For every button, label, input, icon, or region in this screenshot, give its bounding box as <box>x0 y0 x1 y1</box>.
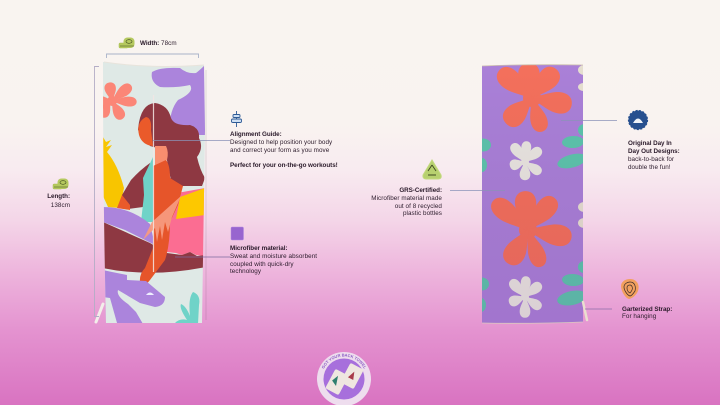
text: gartered strap: For hanging <box>622 313 656 320</box>
text: GRS certified: plastic bottles <box>403 210 442 217</box>
white flower bottom <box>507 276 544 318</box>
alignment guide line on towel <box>152 95 154 272</box>
text: GRS certified: out of 8 recycled <box>395 203 442 210</box>
face <box>138 117 153 146</box>
length bracket <box>94 66 99 316</box>
text: alignment guide <box>230 131 338 169</box>
salmon flower <box>103 82 137 120</box>
text: alignment guide: Perfect for your on-the-go workouts! <box>230 162 338 169</box>
label: length <box>47 193 70 208</box>
text: GRS certified <box>371 187 442 217</box>
logo badge <box>317 352 371 405</box>
label: width: Width: 78cm <box>140 40 177 47</box>
coral flower bottom <box>487 190 573 270</box>
peach arm <box>143 196 181 242</box>
strap <box>583 302 587 320</box>
text: original designs: back-to-back for <box>628 156 674 163</box>
maroon band <box>103 222 206 273</box>
icon: alignment guide <box>232 111 242 127</box>
label: length: 138cm <box>51 202 70 208</box>
text: original designs: double the fun! <box>628 164 671 171</box>
hair <box>138 103 205 186</box>
icon: gartered strap <box>621 279 639 299</box>
front towel <box>96 60 210 325</box>
text: gartered strap <box>622 306 672 320</box>
bottom lavender rabbit <box>103 270 165 324</box>
teal torso <box>141 157 153 222</box>
illustration layer: towels, leader lines and icons <box>52 38 648 405</box>
text: original designs <box>628 140 680 171</box>
yellow skirt <box>176 188 205 219</box>
leader lines <box>153 120 617 309</box>
rabbit eye <box>146 292 154 295</box>
text: alignment guide: Designed to help position your body <box>230 139 332 146</box>
lavender blob top right <box>152 64 206 135</box>
logo cards <box>325 369 349 395</box>
text: original designs: Original Day In <box>628 140 672 147</box>
text: gartered strap: Garterized Strap: <box>622 306 672 312</box>
icon: length tape measure <box>53 178 68 189</box>
back towel <box>475 62 590 326</box>
teal plant <box>175 292 199 324</box>
edge motifs <box>482 124 583 312</box>
icon: original design badge <box>628 110 648 130</box>
orange torso <box>153 160 183 224</box>
coral flower top <box>496 65 572 132</box>
width bracket <box>106 54 198 58</box>
text: original designs: Day Out Designs: <box>628 148 680 155</box>
text: microfiber material: Microfiber material: <box>230 245 287 252</box>
strap <box>96 304 103 322</box>
icon: recycling <box>423 160 441 179</box>
maroon shoulder <box>122 163 150 209</box>
text: microfiber material: Sweat and moisture absorbent <box>230 253 317 260</box>
neck <box>155 146 168 166</box>
orange leg <box>140 222 170 285</box>
text: microfiber material: technology <box>230 268 261 275</box>
text: microfiber material <box>230 245 317 275</box>
text: alignment guide: and correct your form as you move <box>230 147 329 154</box>
text: GRS certified: Microfiber material made <box>371 195 442 202</box>
logo badge: GOT YOUR BACK TOWEL <box>322 354 366 369</box>
text: GRS certified: GRS-Certified: <box>399 187 442 194</box>
icon: width tape measure <box>119 38 134 48</box>
white flower top <box>508 141 544 180</box>
yellow left shape <box>103 137 124 208</box>
lavender arm <box>103 207 155 245</box>
icon: microfiber swatch <box>231 227 244 240</box>
label: length: Length: <box>47 193 70 200</box>
text: alignment guide: Alignment Guide: <box>230 131 282 138</box>
text: microfiber material: coupled with quick-dry <box>230 261 294 268</box>
pink skirt <box>166 188 205 256</box>
